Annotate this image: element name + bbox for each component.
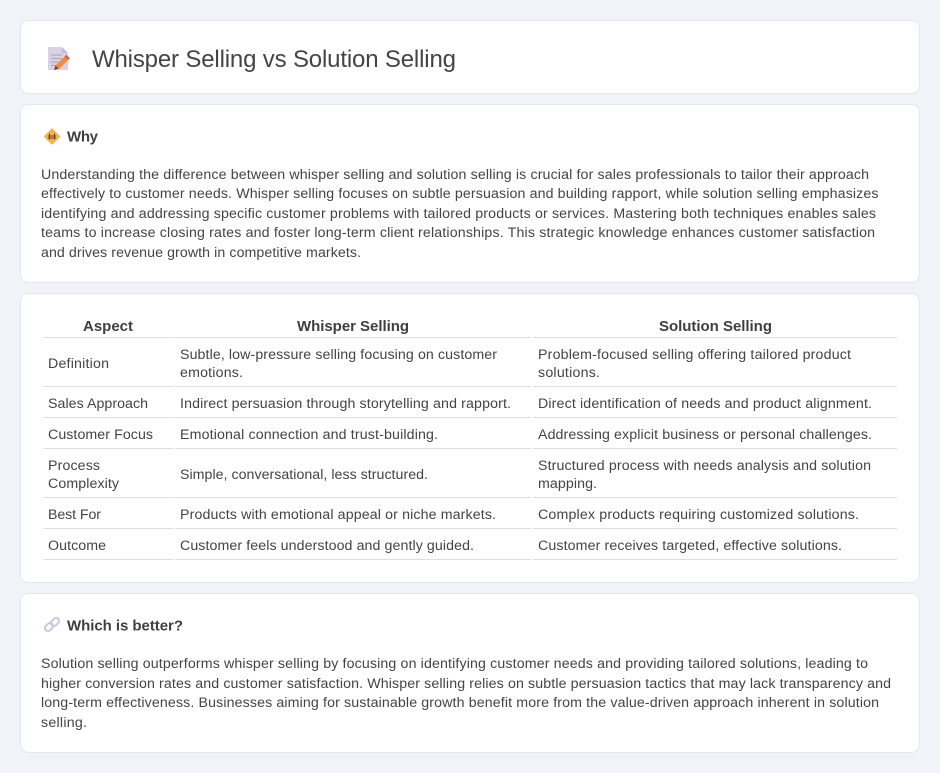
table row: process complexity (43, 458, 897, 498)
table header row: Aspect (83, 318, 133, 335)
text block: why paragraph: Understanding the difference between whisper selling and solution selling is crucial for sales professionals to tailor their approach (41, 167, 869, 183)
table row: process complexity: mapping. (538, 476, 597, 492)
table row: sales approach: Sales Approach (48, 396, 148, 412)
table header row: Whisper Selling (297, 318, 409, 335)
text block: which is better paragraph: Solution selling outperforms whisper selling by focusing on identifying customer needs and providing tailored solutions, leading to (41, 656, 868, 672)
table row: process complexity: Process (48, 458, 100, 474)
table row: best for: Products with emotional appeal or niche markets. (180, 507, 496, 523)
text block: which is better paragraph: higher conversion rates and customer satisfaction. Whisper selling relies on subtle persuasion tactics that may lack transparency and (41, 676, 891, 692)
table row: definition: Subtle, low-pressure selling focusing on customer (180, 347, 497, 363)
icon: memo with pencil (48, 47, 70, 70)
table row: outcome: Customer feels understood and gently guided. (180, 538, 474, 554)
text block: why paragraph: teams to increase closing rates and foster long-term client relationships. This strategic knowledge enhances customer satisfaction (41, 225, 875, 241)
panel: comparison table (20, 294, 920, 582)
table header row: Solution Selling (659, 318, 772, 335)
table row: customer focus: Addressing explicit business or personal challenges. (538, 427, 872, 443)
text block: which is better paragraph: long-term effectiveness. Businesses aiming for sustainable growth benefit more from the value-driven approach inherent in solution (41, 695, 879, 711)
text block: which is better paragraph: selling. (41, 715, 87, 731)
table row: sales approach: Direct identification of needs and product alignment. (538, 396, 872, 412)
table row: best for: Complex products requiring customized solutions. (538, 507, 859, 523)
table header row (43, 318, 897, 338)
table row: best for (43, 507, 897, 529)
icon: link (44, 617, 60, 632)
table row: best for: Best For (48, 507, 101, 523)
table row: process complexity: Structured process with needs analysis and solution (538, 458, 871, 474)
text block: which is better paragraph (41, 656, 891, 731)
heading: which is better: Which is better? (67, 618, 183, 634)
panel: title header (20, 20, 920, 94)
text block: why paragraph: and drives revenue growth in competitive markets. (41, 245, 361, 261)
panel: which is better (20, 594, 920, 752)
title: Whisper Selling vs Solution Selling (92, 46, 456, 73)
table row: customer focus: Customer Focus (48, 427, 153, 443)
table row: process complexity: Simple, conversational, less structured. (180, 467, 428, 483)
table row: sales approach (43, 396, 897, 418)
table row: definition: solutions. (538, 365, 600, 381)
table row: definition: Problem-focused selling offering tailored product (538, 347, 851, 363)
table row: outcome (43, 538, 897, 560)
icon: warning diamond (44, 128, 60, 145)
text block: why paragraph (41, 167, 878, 261)
table row: customer focus: Emotional connection and trust-building. (180, 427, 438, 443)
text block: why paragraph: effectively to customer needs. Whisper selling focuses on subtle persuasion and building rapport, while solution selling emphasizes (41, 186, 878, 202)
table row: outcome: Customer receives targeted, effective solutions. (538, 538, 842, 554)
table row: outcome: Outcome (48, 538, 106, 554)
table row: sales approach: Indirect persuasion through storytelling and rapport. (180, 396, 511, 412)
heading: why: Why (67, 128, 99, 146)
text block: why paragraph: identifying and addressing specific customer problems with tailored products or services. Mastering both techniques enables sales (41, 206, 876, 222)
panel: why (20, 104, 920, 282)
table row: definition (43, 347, 897, 387)
table row: definition: Definition (48, 356, 109, 372)
table row: process complexity: Complexity (48, 476, 120, 492)
table row: customer focus (43, 427, 897, 449)
table row: definition: emotions. (180, 365, 243, 381)
